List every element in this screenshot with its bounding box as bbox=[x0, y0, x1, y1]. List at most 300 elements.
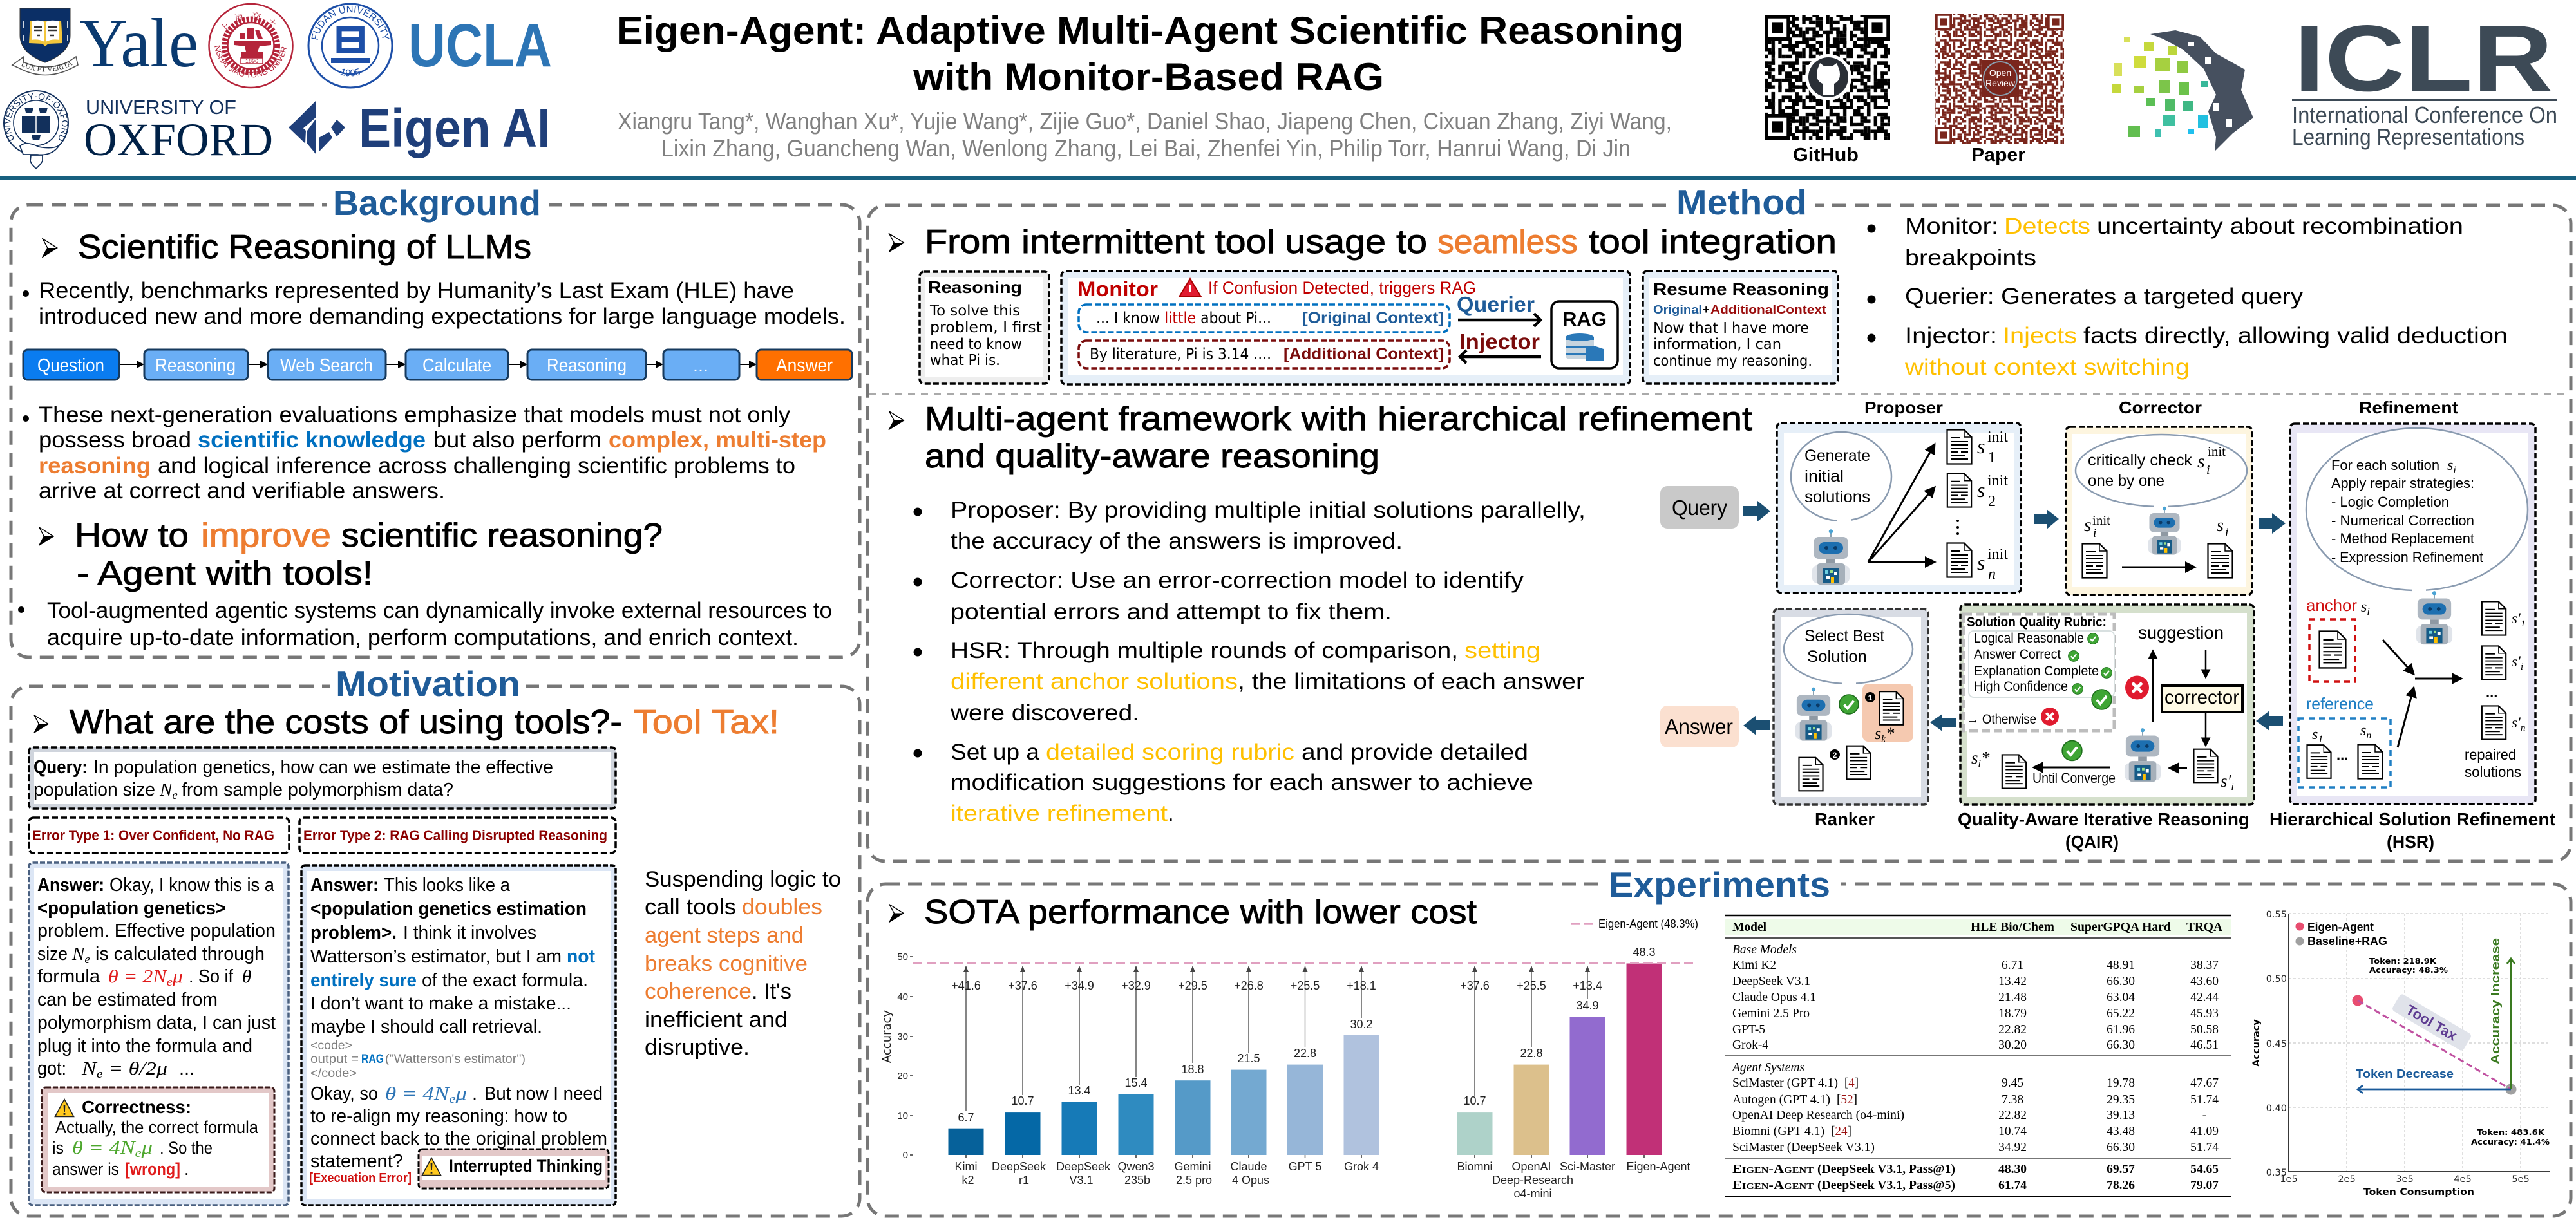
agent systems group: 7.38 bbox=[2002, 1093, 2023, 1107]
repaired solutions: 1 bbox=[2521, 619, 2525, 629]
pipeline: ranker: Solution bbox=[1807, 648, 1867, 666]
Eigen-Agent rows: 48.30 bbox=[1998, 1163, 2027, 1176]
text block: component roles: without context switching bbox=[1904, 355, 2190, 380]
pipeline: hierarchical solution refinement: - Method Replacement bbox=[2331, 530, 2474, 547]
icon: warning bbox=[422, 1158, 440, 1176]
agent systems group: 66.30 bbox=[2107, 1141, 2135, 1154]
reference solutions: reference bbox=[2306, 694, 2374, 713]
repaired solutions: i bbox=[2521, 662, 2523, 672]
agent systems group: 34.92 bbox=[1998, 1141, 2027, 1154]
text block: component roles: uncertainty about recombination bbox=[2097, 214, 2463, 239]
authors bbox=[618, 108, 1672, 162]
pipeline: corrector: i bbox=[2206, 463, 2210, 477]
subheading: costs of tools bbox=[34, 704, 779, 741]
diagram box: reasoning: To solve this bbox=[929, 303, 1020, 319]
answer box: RAG disrupted: θ = 4N bbox=[385, 1084, 438, 1104]
base models group: 48.91 bbox=[2107, 959, 2135, 972]
text block: tool tax summary: breaks cognitive bbox=[645, 952, 808, 976]
answer box: RAG disrupted: Watterson’s estimator, but I am bbox=[310, 946, 562, 967]
chart legend: Baseline+RAG bbox=[2307, 935, 2387, 948]
text block: framework bullets: Corrector: Use an error-correction model to identify bbox=[951, 568, 1524, 593]
subheading: how to improve: How to bbox=[75, 517, 189, 554]
answer box: over confident: θ bbox=[242, 966, 251, 987]
pipeline: quality-aware iterative reasoning bbox=[1960, 605, 2254, 805]
top-ranked solution: * bbox=[1886, 724, 1894, 743]
pipeline: proposer: Proposer bbox=[1864, 398, 1943, 417]
table header bbox=[1732, 921, 2222, 934]
delta labels bbox=[951, 979, 1602, 992]
x axis labels: OpenAI bbox=[1511, 1160, 1551, 1173]
answer box: RAG disrupted: This looks like a bbox=[384, 875, 511, 896]
pipeline: hierarchical solution refinement: - Logic Completion bbox=[2331, 494, 2449, 510]
y axis: Accuracy bbox=[880, 1010, 894, 1063]
base models group: Claude Opus 4.1 bbox=[1732, 991, 1816, 1004]
x axis labels: DeepSeek bbox=[1056, 1160, 1111, 1173]
arrow: ranker to answer bbox=[1743, 715, 1770, 735]
agent systems group: 39.13 bbox=[2107, 1109, 2135, 1122]
text block: component roles: Injector: bbox=[1905, 323, 1997, 348]
value labels: 6.7 bbox=[958, 1111, 974, 1124]
agent systems group: [24] bbox=[1831, 1125, 1852, 1138]
GitHub QR code: GitHub bbox=[1793, 145, 1859, 165]
arrow: token decrease: Token Decrease bbox=[2356, 1067, 2454, 1080]
pipeline: corrector: s bbox=[2084, 514, 2092, 536]
answer box: RAG disrupted: RAG bbox=[361, 1053, 384, 1066]
axis labels: Token Consumption bbox=[2363, 1187, 2474, 1197]
caption: QAIR bbox=[1958, 809, 2249, 852]
answer box: RAG disrupted: μ bbox=[455, 1084, 467, 1104]
Eigen-Agent rows: 69.57 bbox=[2107, 1163, 2135, 1176]
flow diagram: reasoning chain: Web Search bbox=[280, 355, 373, 376]
chart legend: Eigen-Agent (48.3%) bbox=[1598, 917, 1698, 930]
original context row bbox=[1079, 305, 1450, 332]
base models group: 46.51 bbox=[2190, 1038, 2219, 1052]
subheading: costs of tools: Tool Tax! bbox=[634, 704, 779, 741]
base models group: 18.79 bbox=[1998, 1007, 2027, 1020]
value labels: 34.9 bbox=[1576, 999, 1599, 1012]
repaired solutions: ... bbox=[2486, 684, 2497, 700]
query box bbox=[29, 747, 616, 809]
chart legend bbox=[2295, 921, 2387, 948]
query box: Query: bbox=[33, 757, 88, 778]
value labels: 10.7 bbox=[1463, 1094, 1486, 1107]
Eigen-Agent rows: 54.65 bbox=[2190, 1163, 2219, 1176]
base models group: 43.60 bbox=[2190, 975, 2219, 988]
authors: Lixin Zhang, Guancheng Wan, Wenlong Zhang, Lei Bai, Zhenfei Yin, Philip Torr, Hanrui Wang, Di Jin bbox=[661, 135, 1631, 162]
annotation: baseline point bbox=[2471, 1128, 2550, 1147]
x axis labels: Biomni bbox=[1457, 1160, 1493, 1173]
answer box: over confident: ... bbox=[179, 1058, 194, 1079]
base models group: 61.96 bbox=[2107, 1023, 2135, 1037]
answer box: RAG disrupted: not bbox=[567, 946, 595, 967]
base models group: Kimi K2 bbox=[1732, 959, 1776, 972]
x axis labels: Qwen3 bbox=[1117, 1160, 1155, 1173]
answer box: RAG disrupted: [Execuation Error] bbox=[309, 1171, 412, 1185]
reference solutions: s bbox=[2312, 726, 2318, 743]
base models group: Gemini 2.5 Pro bbox=[1732, 1007, 1810, 1020]
answer box: over confident: size bbox=[37, 944, 68, 964]
pipeline: proposer: n bbox=[1988, 566, 1996, 583]
bar chart: accuracy bbox=[880, 917, 1698, 1200]
subheading: seamless tool integration: seamless bbox=[1437, 223, 1578, 261]
arrow: proposer to corrector bbox=[2034, 509, 2059, 529]
x axis labels: Gemini bbox=[1174, 1160, 1211, 1173]
agent systems group: [52] bbox=[1837, 1093, 1857, 1107]
axis labels: 0.35 bbox=[2266, 1168, 2287, 1178]
text block: framework bullets: detailed scoring rubric bbox=[1046, 740, 1294, 765]
delta labels: +29.5 bbox=[1178, 979, 1208, 992]
panel: Motivation bbox=[11, 664, 860, 1216]
logo: Fudan University bbox=[308, 3, 393, 89]
panel: Method bbox=[867, 182, 2571, 861]
diagram box: resume reasoning bbox=[1643, 271, 1838, 384]
flow diagram: reasoning chain: Question bbox=[37, 355, 104, 376]
agent systems group: 9.45 bbox=[2002, 1076, 2023, 1090]
error type label 2: Error Type 2: RAG Calling Disrupted Reasoning bbox=[303, 827, 607, 843]
caption: QAIR: Quality-Aware Iterative Reasoning bbox=[1958, 809, 2249, 829]
pipeline: ranker: 2 bbox=[1833, 751, 1837, 760]
pipeline: quality-aware iterative reasoning: suggestion bbox=[2138, 623, 2224, 643]
answer box: RAG disrupted: to re-align my reasoning: how to bbox=[310, 1106, 567, 1127]
agent systems group: SciMaster (GPT 4.1) bbox=[1732, 1076, 1838, 1090]
delta labels: +41.6 bbox=[951, 979, 981, 992]
authors: Xiangru Tang*, Wanghan Xu*, Yujie Wang*, Zijie Guo*, Daniel Shao, Jiapeng Chen, Cixuan Zhang, Ziyi Wang, bbox=[618, 108, 1672, 135]
x axis labels: Claude bbox=[1230, 1160, 1267, 1173]
table header: SuperGPQA Hard bbox=[2070, 921, 2171, 934]
base models group: 63.04 bbox=[2107, 991, 2135, 1004]
arrow: query to proposer bbox=[1743, 501, 1770, 521]
repaired solutions: s′ bbox=[2512, 653, 2521, 670]
base models group: 50.58 bbox=[2190, 1023, 2219, 1037]
pipeline: hierarchical solution refinement: i bbox=[2453, 465, 2456, 476]
pipeline: hierarchical solution refinement: - Numerical Correction bbox=[2331, 512, 2474, 529]
caption: HSR: Hierarchical Solution Refinement bbox=[2269, 809, 2555, 829]
caption: Ranker: Ranker bbox=[1815, 809, 1875, 829]
diagram box: reasoning bbox=[920, 272, 1049, 384]
logo: ICLR head bbox=[2112, 30, 2253, 151]
base models group bbox=[1732, 943, 2219, 1052]
flow diagram: reasoning chain bbox=[23, 350, 852, 380]
text block: next-generation evaluations: scientific knowledge bbox=[198, 427, 426, 453]
flow diagram: reasoning chain: Calculate bbox=[422, 355, 491, 376]
answer box: over confident: can be estimated from bbox=[37, 990, 218, 1010]
text block: component roles: Monitor: bbox=[1905, 214, 1998, 239]
pipeline: quality-aware iterative reasoning: i bbox=[1978, 758, 1981, 769]
reference solutions: 1 bbox=[2318, 734, 2323, 745]
answer box: RAG disrupted: </code> bbox=[310, 1067, 357, 1080]
injector arrow bbox=[1459, 330, 1541, 363]
top-ranked solution: s bbox=[1875, 724, 1881, 743]
axis labels: 0.55 bbox=[2266, 910, 2287, 920]
repaired solutions: s′ bbox=[2512, 715, 2521, 731]
text block: framework bullets: , the limitations of each answer bbox=[1238, 669, 1584, 694]
logo: Shanghai Jiao Tong University bbox=[208, 3, 294, 89]
correctness callout: . So the bbox=[160, 1138, 213, 1158]
base models group: 42.44 bbox=[2190, 991, 2219, 1004]
pipeline: corrector: init bbox=[2208, 444, 2226, 459]
text block: tool tax summary: doubles bbox=[742, 895, 822, 919]
answer box: RAG disrupted: I think it involves bbox=[403, 923, 536, 943]
diagram box: monitor bbox=[1061, 271, 1630, 384]
correctness callout: is bbox=[52, 1138, 64, 1158]
subheading: SOTA performance: SOTA performance with lower cost bbox=[924, 894, 1477, 931]
repaired solutions: s′ bbox=[2512, 610, 2521, 626]
correctness callout: Actually, the correct formula bbox=[55, 1118, 259, 1137]
pipeline: hierarchical solution refinement: - Expression Refinement bbox=[2331, 549, 2483, 565]
text block: component roles: breakpoints bbox=[1905, 245, 2036, 270]
answer box: over confident bbox=[29, 863, 289, 1205]
answer box: over confident: μ bbox=[172, 966, 183, 987]
Eigen-Agent rows: 61.74 bbox=[1998, 1179, 2027, 1192]
results table bbox=[1725, 915, 2231, 1197]
pipeline: quality-aware iterative reasoning: s bbox=[1971, 748, 1978, 767]
delta labels: +26.8 bbox=[1234, 979, 1264, 992]
logo: Oxford: UNIVERSITY OF bbox=[86, 96, 236, 118]
x axis labels: 235b bbox=[1124, 1174, 1150, 1187]
correctness callout: answer is bbox=[52, 1159, 119, 1179]
correctness callout: [wrong] bbox=[125, 1159, 180, 1179]
subheading: how to improve: - Agent with tools! bbox=[77, 555, 373, 592]
text block: tool tax summary: disruptive. bbox=[645, 1035, 750, 1060]
text block: next-generation evaluations: These next-generation evaluations emphasize that models must not only bbox=[39, 402, 791, 427]
answer box: over confident: Answer: bbox=[37, 875, 104, 896]
arrow: refinement to QAIR bbox=[2256, 711, 2283, 731]
logo: ICLR wordmark: Learning Representations bbox=[2292, 124, 2524, 150]
delta labels: +25.5 bbox=[1291, 979, 1320, 992]
value labels: 21.5 bbox=[1237, 1052, 1260, 1065]
pipeline: hierarchical solution refinement bbox=[2269, 398, 2555, 852]
arrow: accuracy increase: Accuracy Increase bbox=[2489, 938, 2502, 1064]
GitHub QR code bbox=[1765, 15, 1890, 165]
error type label 1: Error Type 1: Over Confident, No RAG bbox=[32, 827, 274, 843]
agent systems group: 29.35 bbox=[2107, 1093, 2135, 1107]
text block: framework bullets: modification suggestions for each answer to achieve bbox=[951, 770, 1533, 795]
pipeline: ranker bbox=[1774, 609, 1928, 805]
error type label 2 bbox=[299, 818, 616, 853]
arrow: corrector to refinement bbox=[2259, 513, 2286, 534]
annotation: baseline point: Accuracy: 41.4% bbox=[2471, 1138, 2550, 1147]
base models group: 45.93 bbox=[2190, 1007, 2219, 1020]
icon: robot bbox=[2148, 507, 2181, 554]
icon: database bbox=[1566, 333, 1604, 361]
text block: framework bullets: and provide detailed bbox=[1302, 740, 1528, 765]
logo: Shanghai Jiao Tong University: 上海交大 bbox=[222, 12, 276, 33]
value labels: 22.8 bbox=[1520, 1047, 1543, 1060]
icon: warning bbox=[55, 1100, 73, 1116]
repaired solutions: solutions bbox=[2465, 764, 2521, 780]
rubric: High Confidence bbox=[1974, 679, 2068, 694]
base models group: 66.30 bbox=[2107, 1038, 2135, 1052]
answer box: over confident: problem. Effective population bbox=[37, 921, 276, 941]
text block: next-generation evaluations: possess broad bbox=[39, 427, 191, 453]
text block: benchmarks: Recently, benchmarks represented by Humanity’s Last Exam (HLE) have bbox=[39, 278, 794, 303]
x axis labels: Grok 4 bbox=[1344, 1160, 1379, 1173]
annotation: Eigen-Agent point bbox=[2369, 957, 2448, 975]
additional context row: By literature, Pi is 3.14 .... bbox=[1090, 345, 1271, 363]
icon: robot bbox=[1795, 688, 1832, 741]
pipeline: corrector bbox=[2066, 398, 2252, 595]
base models group: Grok-4 bbox=[1732, 1038, 1768, 1052]
axis labels bbox=[2251, 910, 2530, 1197]
logo: Oxford: UNIVERSITY·OF·OXFORD bbox=[5, 93, 68, 142]
flow diagram: reasoning chain: Reasoning bbox=[547, 355, 627, 376]
original context row: ... I know little about Pi... bbox=[1096, 309, 1271, 327]
paper QR code: Review bbox=[1985, 78, 2016, 88]
pipeline: proposer: 1 bbox=[1988, 449, 1996, 466]
text block: component roles bbox=[1868, 214, 2508, 380]
pipeline: corrector: s bbox=[2197, 451, 2205, 472]
answer box: over confident: N bbox=[72, 944, 84, 964]
pipeline: corrector: critically check bbox=[2088, 451, 2192, 469]
pipeline: quality-aware iterative reasoning: * bbox=[1981, 748, 1990, 767]
text block: framework bullets: setting bbox=[1464, 638, 1540, 663]
answer box: RAG disrupted: Answer: bbox=[310, 875, 379, 896]
query box: population size bbox=[33, 780, 155, 800]
top-ranked solution bbox=[1862, 684, 1913, 745]
pipeline: quality-aware iterative reasoning: s′ bbox=[2221, 771, 2231, 791]
error type label 1 bbox=[29, 818, 289, 853]
icon: robot bbox=[1812, 529, 1850, 585]
value labels: 15.4 bbox=[1124, 1076, 1148, 1089]
Eigen-Agent rows: Eigen-Agent bbox=[1732, 1179, 1814, 1192]
subheading: seamless tool integration bbox=[889, 223, 1837, 261]
answer box: RAG disrupted: ("Watterson's estimator") bbox=[385, 1053, 526, 1066]
base models group: 21.48 bbox=[1998, 991, 2027, 1004]
anchor solution bbox=[2306, 596, 2370, 682]
diagram box: resume reasoning: Resume Reasoning bbox=[1653, 279, 1829, 299]
x axis labels: o4-mini bbox=[1513, 1187, 1552, 1200]
text block: next-generation evaluations: but also perform bbox=[433, 427, 601, 453]
answer box: over confident: plug it into the formula and bbox=[37, 1036, 252, 1056]
paper QR code: Open bbox=[1989, 68, 2011, 78]
logo: ICLR wordmark: ICLR bbox=[2294, 6, 2553, 111]
text block: tool-augmented systems: Tool-augmented agentic systems can dynamically invoke external resources to bbox=[47, 598, 832, 623]
additional context row bbox=[1079, 341, 1450, 368]
answer box: over confident: polymorphism data, I can just bbox=[37, 1013, 276, 1033]
pipeline: proposer: initial bbox=[1804, 467, 1844, 485]
annotation: Eigen-Agent point: Token: 218.9K bbox=[2369, 957, 2437, 966]
logo: Oxford: OXFORD bbox=[84, 114, 273, 165]
diagram box: reasoning: Reasoning bbox=[928, 277, 1022, 297]
x axis labels bbox=[954, 1155, 1690, 1200]
diagram box: reasoning: what Pi is. bbox=[930, 352, 1000, 369]
logo: ICLR wordmark: International Conference On bbox=[2292, 102, 2557, 128]
diagram box: resume reasoning: Now that I have more bbox=[1653, 320, 1809, 337]
axis labels: 1e5 bbox=[2280, 1174, 2298, 1185]
text block: component roles: Detects bbox=[2004, 214, 2090, 239]
axis labels: 2e5 bbox=[2338, 1174, 2356, 1185]
answer box: RAG disrupted: entirely sure bbox=[310, 970, 417, 991]
agent systems group: 47.67 bbox=[2190, 1076, 2219, 1090]
query box: from sample polymorphism data? bbox=[182, 780, 453, 800]
x axis labels: 4 Opus bbox=[1232, 1174, 1269, 1187]
pipeline: query input bbox=[1660, 486, 1739, 529]
answer box: over confident: θ = 2N bbox=[108, 966, 161, 987]
value labels bbox=[958, 946, 1656, 1124]
pipeline: proposer bbox=[1777, 398, 2021, 593]
pipeline: proposer: s bbox=[1977, 435, 1985, 458]
logo: Fudan University: FUDAN UNIVERSITY bbox=[312, 5, 390, 40]
table header: TRQA bbox=[2186, 921, 2222, 934]
agent systems group: Biomni (GPT 4.1) bbox=[1732, 1125, 1824, 1138]
repaired solutions: n bbox=[2521, 723, 2525, 733]
delta labels: +34.9 bbox=[1065, 979, 1094, 992]
diagram box: resume reasoning: Original bbox=[1653, 303, 1702, 316]
agent systems group: SciMaster (DeepSeek V3.1) bbox=[1732, 1141, 1875, 1154]
axis labels: 0.45 bbox=[2266, 1039, 2287, 1049]
panel: Experiments bbox=[867, 865, 2571, 1216]
diagram box: reasoning: problem, I first bbox=[930, 319, 1042, 336]
rubric bbox=[1964, 614, 2114, 731]
text block: next-generation evaluations: arrive at correct and verifiable answers. bbox=[39, 478, 445, 503]
answer box: over confident: N bbox=[82, 1058, 94, 1079]
caption: QAIR: (QAIR) bbox=[2065, 832, 2119, 852]
base models group: GPT-5 bbox=[1732, 1023, 1765, 1037]
answer box: over confident: formula bbox=[37, 966, 100, 987]
answer box: RAG disrupted: Okay, so bbox=[310, 1084, 378, 1104]
querier arrow: Querier bbox=[1457, 292, 1535, 316]
bars bbox=[948, 963, 1662, 1155]
logo: Yale bbox=[12, 5, 198, 82]
text block: benchmarks bbox=[23, 278, 846, 329]
text block: benchmarks: introduced new and more demanding expectations for large language models. bbox=[39, 304, 846, 329]
value labels: 18.8 bbox=[1181, 1063, 1204, 1076]
heading: Motivation: Motivation bbox=[336, 664, 520, 704]
icon: robot bbox=[2416, 591, 2452, 644]
answer box: RAG disrupted: of the exact formula. bbox=[422, 970, 588, 991]
y axis: 10 bbox=[897, 1111, 908, 1121]
interrupted thinking callout: Interrupted Thinking bbox=[449, 1156, 603, 1176]
text block: tool tax summary: It's bbox=[764, 979, 791, 1004]
x axis labels: r1 bbox=[1019, 1174, 1029, 1187]
panel: Background bbox=[11, 183, 860, 657]
corrector tool: corrector bbox=[2164, 687, 2239, 708]
repaired solutions bbox=[2465, 601, 2525, 780]
pipeline: corrector: init bbox=[2092, 512, 2110, 528]
answer box: over confident: e bbox=[167, 975, 173, 989]
anchor solution: anchor bbox=[2306, 596, 2357, 615]
heading: Background: Background bbox=[333, 183, 541, 223]
Eigen-Agent rows: 79.07 bbox=[2190, 1179, 2219, 1192]
poster title: Eigen-Agent: Adaptive Multi-Agent Scientific Reasoning bbox=[616, 9, 1684, 52]
injector arrow: Injector bbox=[1459, 330, 1540, 353]
x axis labels: V3.1 bbox=[1069, 1174, 1094, 1187]
answer box: RAG disrupted: output = bbox=[310, 1053, 359, 1066]
axis labels: 3e5 bbox=[2396, 1174, 2414, 1185]
poster title: with Monitor-Based RAG bbox=[913, 55, 1384, 99]
delta labels: +37.6 bbox=[1460, 979, 1490, 992]
base models group: 6.71 bbox=[2002, 959, 2023, 972]
answer box: RAG disrupted bbox=[301, 865, 616, 1205]
pipeline: proposer: init bbox=[1987, 429, 2008, 446]
answer box: RAG disrupted: problem>. bbox=[310, 923, 397, 943]
text block: tool tax summary: coherence bbox=[645, 979, 752, 1004]
pipeline: proposer: Generate bbox=[1804, 447, 1870, 465]
x axis labels: GPT 5 bbox=[1289, 1160, 1321, 1173]
y axis: 50 bbox=[897, 952, 908, 962]
reference solutions: s bbox=[2360, 722, 2366, 739]
Eigen-Agent rows: Eigen-Agent bbox=[1732, 1163, 1814, 1176]
pipeline: corrector: Corrector bbox=[2119, 398, 2202, 417]
answer box: over confident: e bbox=[84, 953, 90, 966]
agent systems group bbox=[1731, 1061, 2219, 1154]
caption: HSR: (HSR) bbox=[2387, 832, 2434, 852]
diagram box: reasoning: need to know bbox=[930, 336, 1022, 353]
logo: Fudan University: 旦 bbox=[328, 22, 372, 71]
pipeline: corrector: s bbox=[2217, 516, 2224, 536]
logo: Eigen AI: Eigen AI bbox=[359, 98, 551, 158]
reference solutions: n bbox=[2366, 730, 2371, 741]
